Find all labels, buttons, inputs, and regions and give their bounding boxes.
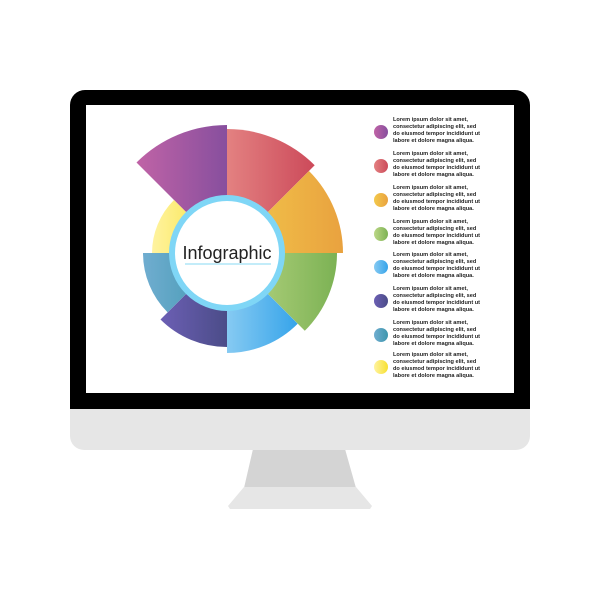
legend item 6: consectetur adipiscing elit, sed (393, 293, 476, 299)
legend item 3: Lorem ipsum dolor sit amet, (393, 185, 468, 191)
legend item 3: do eiusmod tempor incididunt ut (393, 199, 480, 205)
legend (374, 117, 480, 379)
legend item 4: do eiusmod tempor incididunt ut (393, 233, 480, 239)
legend item 5: labore et dolore magna aliqua. (393, 273, 474, 279)
segment red (227, 129, 315, 253)
center circle (172, 198, 282, 308)
legend item 4 (374, 219, 480, 246)
legend item 7: do eiusmod tempor incididunt ut (393, 334, 480, 340)
legend item 8: labore et dolore magna aliqua. (393, 373, 474, 379)
legend item 1: consectetur adipiscing elit, sed (393, 124, 476, 130)
legend item 6: Lorem ipsum dolor sit amet, (393, 286, 468, 292)
legend item 1: do eiusmod tempor incididunt ut (393, 131, 480, 137)
segment green (227, 253, 337, 331)
center circle: Infographic (182, 243, 272, 263)
segment navy (160, 253, 227, 347)
legend item 2: Lorem ipsum dolor sit amet, (393, 151, 468, 157)
legend item 4: Lorem ipsum dolor sit amet, (393, 219, 468, 225)
legend item 3 (374, 185, 480, 212)
legend item 2 (374, 151, 480, 178)
legend item 5 (374, 252, 480, 279)
legend item 7: consectetur adipiscing elit, sed (393, 327, 476, 333)
legend item 4: labore et dolore magna aliqua. (393, 240, 474, 246)
legend item 5: do eiusmod tempor incididunt ut (393, 266, 480, 272)
legend item 5: Lorem ipsum dolor sit amet, (393, 252, 468, 258)
legend item 8: consectetur adipiscing elit, sed (393, 359, 476, 365)
legend item 6: do eiusmod tempor incididunt ut (393, 300, 480, 306)
legend item 8: do eiusmod tempor incididunt ut (393, 366, 480, 372)
legend item 3: labore et dolore magna aliqua. (393, 206, 474, 212)
legend item 7: labore et dolore magna aliqua. (393, 341, 474, 347)
segment yellow (152, 200, 227, 253)
screen (86, 105, 514, 393)
legend item 1 (374, 117, 480, 144)
segment teal (143, 253, 227, 312)
legend item 8 (374, 352, 480, 379)
legend item 4: consectetur adipiscing elit, sed (393, 226, 476, 232)
legend item 7 (374, 320, 480, 347)
legend item 2: do eiusmod tempor incididunt ut (393, 165, 480, 171)
legend item 7: Lorem ipsum dolor sit amet, (393, 320, 468, 326)
monitor bezel (70, 90, 530, 409)
legend item 8: Lorem ipsum dolor sit amet, (393, 352, 468, 358)
legend item 2: labore et dolore magna aliqua. (393, 172, 474, 178)
legend item 1: labore et dolore magna aliqua. (393, 138, 474, 144)
legend item 6: labore et dolore magna aliqua. (393, 307, 474, 313)
legend item 1: Lorem ipsum dolor sit amet, (393, 117, 468, 123)
segment orange (227, 171, 343, 253)
segment blue (227, 253, 298, 353)
legend item 2: consectetur adipiscing elit, sed (393, 158, 476, 164)
legend item 5: consectetur adipiscing elit, sed (393, 259, 476, 265)
segment purple (136, 125, 227, 253)
legend item 6 (374, 286, 480, 313)
legend item 3: consectetur adipiscing elit, sed (393, 192, 476, 198)
monitor chin (70, 395, 530, 450)
